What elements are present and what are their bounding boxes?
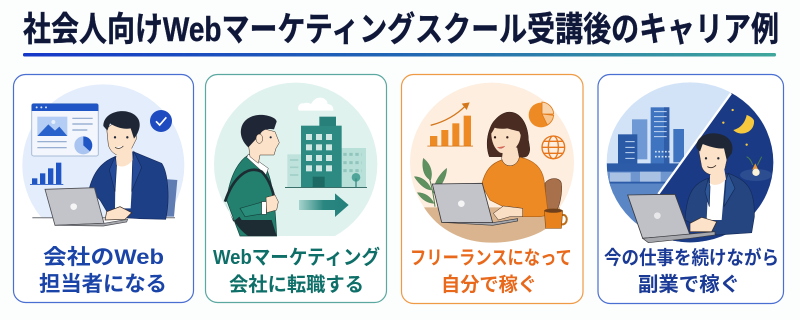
city	[600, 107, 703, 247]
label	[604, 246, 779, 296]
icon: check badge	[150, 110, 172, 132]
label	[410, 247, 572, 296]
man in profile	[225, 115, 279, 236]
woman	[482, 112, 548, 220]
icon: mug	[544, 209, 567, 228]
icon: browser window	[32, 104, 98, 156]
desk line	[32, 217, 175, 218]
panel: freelance	[402, 74, 583, 304]
label: 会社に転職する	[229, 274, 364, 296]
icon: bar chart	[30, 163, 63, 185]
panel: career change	[206, 74, 386, 302]
illustration: man at laptop with web dashboard	[22, 84, 184, 226]
icon: cloud	[298, 98, 333, 111]
icon: laptop	[432, 183, 518, 225]
label: 会社のWeb	[43, 246, 164, 269]
chair	[545, 179, 562, 210]
icon: rising bar chart	[427, 102, 473, 146]
icon: plant	[414, 158, 447, 207]
table	[424, 207, 560, 243]
icon: buildings	[285, 117, 367, 188]
panel: side job	[597, 74, 784, 304]
icon: arrow	[299, 193, 349, 217]
man	[89, 111, 177, 220]
label: Webマーケティング	[213, 245, 380, 269]
label: 今の仕事を続けながら	[604, 246, 779, 269]
icon: laptop	[628, 194, 715, 243]
label	[39, 246, 167, 296]
icon: pie chart	[529, 102, 554, 127]
label: 副業で稼ぐ	[638, 273, 740, 296]
label: 担当者になる	[39, 273, 167, 296]
label: フリーランスになって	[410, 247, 572, 269]
night sky	[657, 92, 774, 242]
illustration: day and night side job	[606, 82, 774, 243]
label	[213, 245, 380, 296]
illustration: woman freelancer at laptop	[410, 83, 574, 243]
title underline	[23, 53, 776, 56]
illustration: man walking to company buildings	[214, 83, 377, 246]
label: 自分で稼ぐ	[441, 274, 537, 296]
icon: laptop	[45, 188, 128, 226]
man	[685, 133, 754, 235]
lamp	[747, 157, 762, 165]
panel: company web manager	[14, 74, 194, 302]
icon: globe	[542, 136, 565, 159]
